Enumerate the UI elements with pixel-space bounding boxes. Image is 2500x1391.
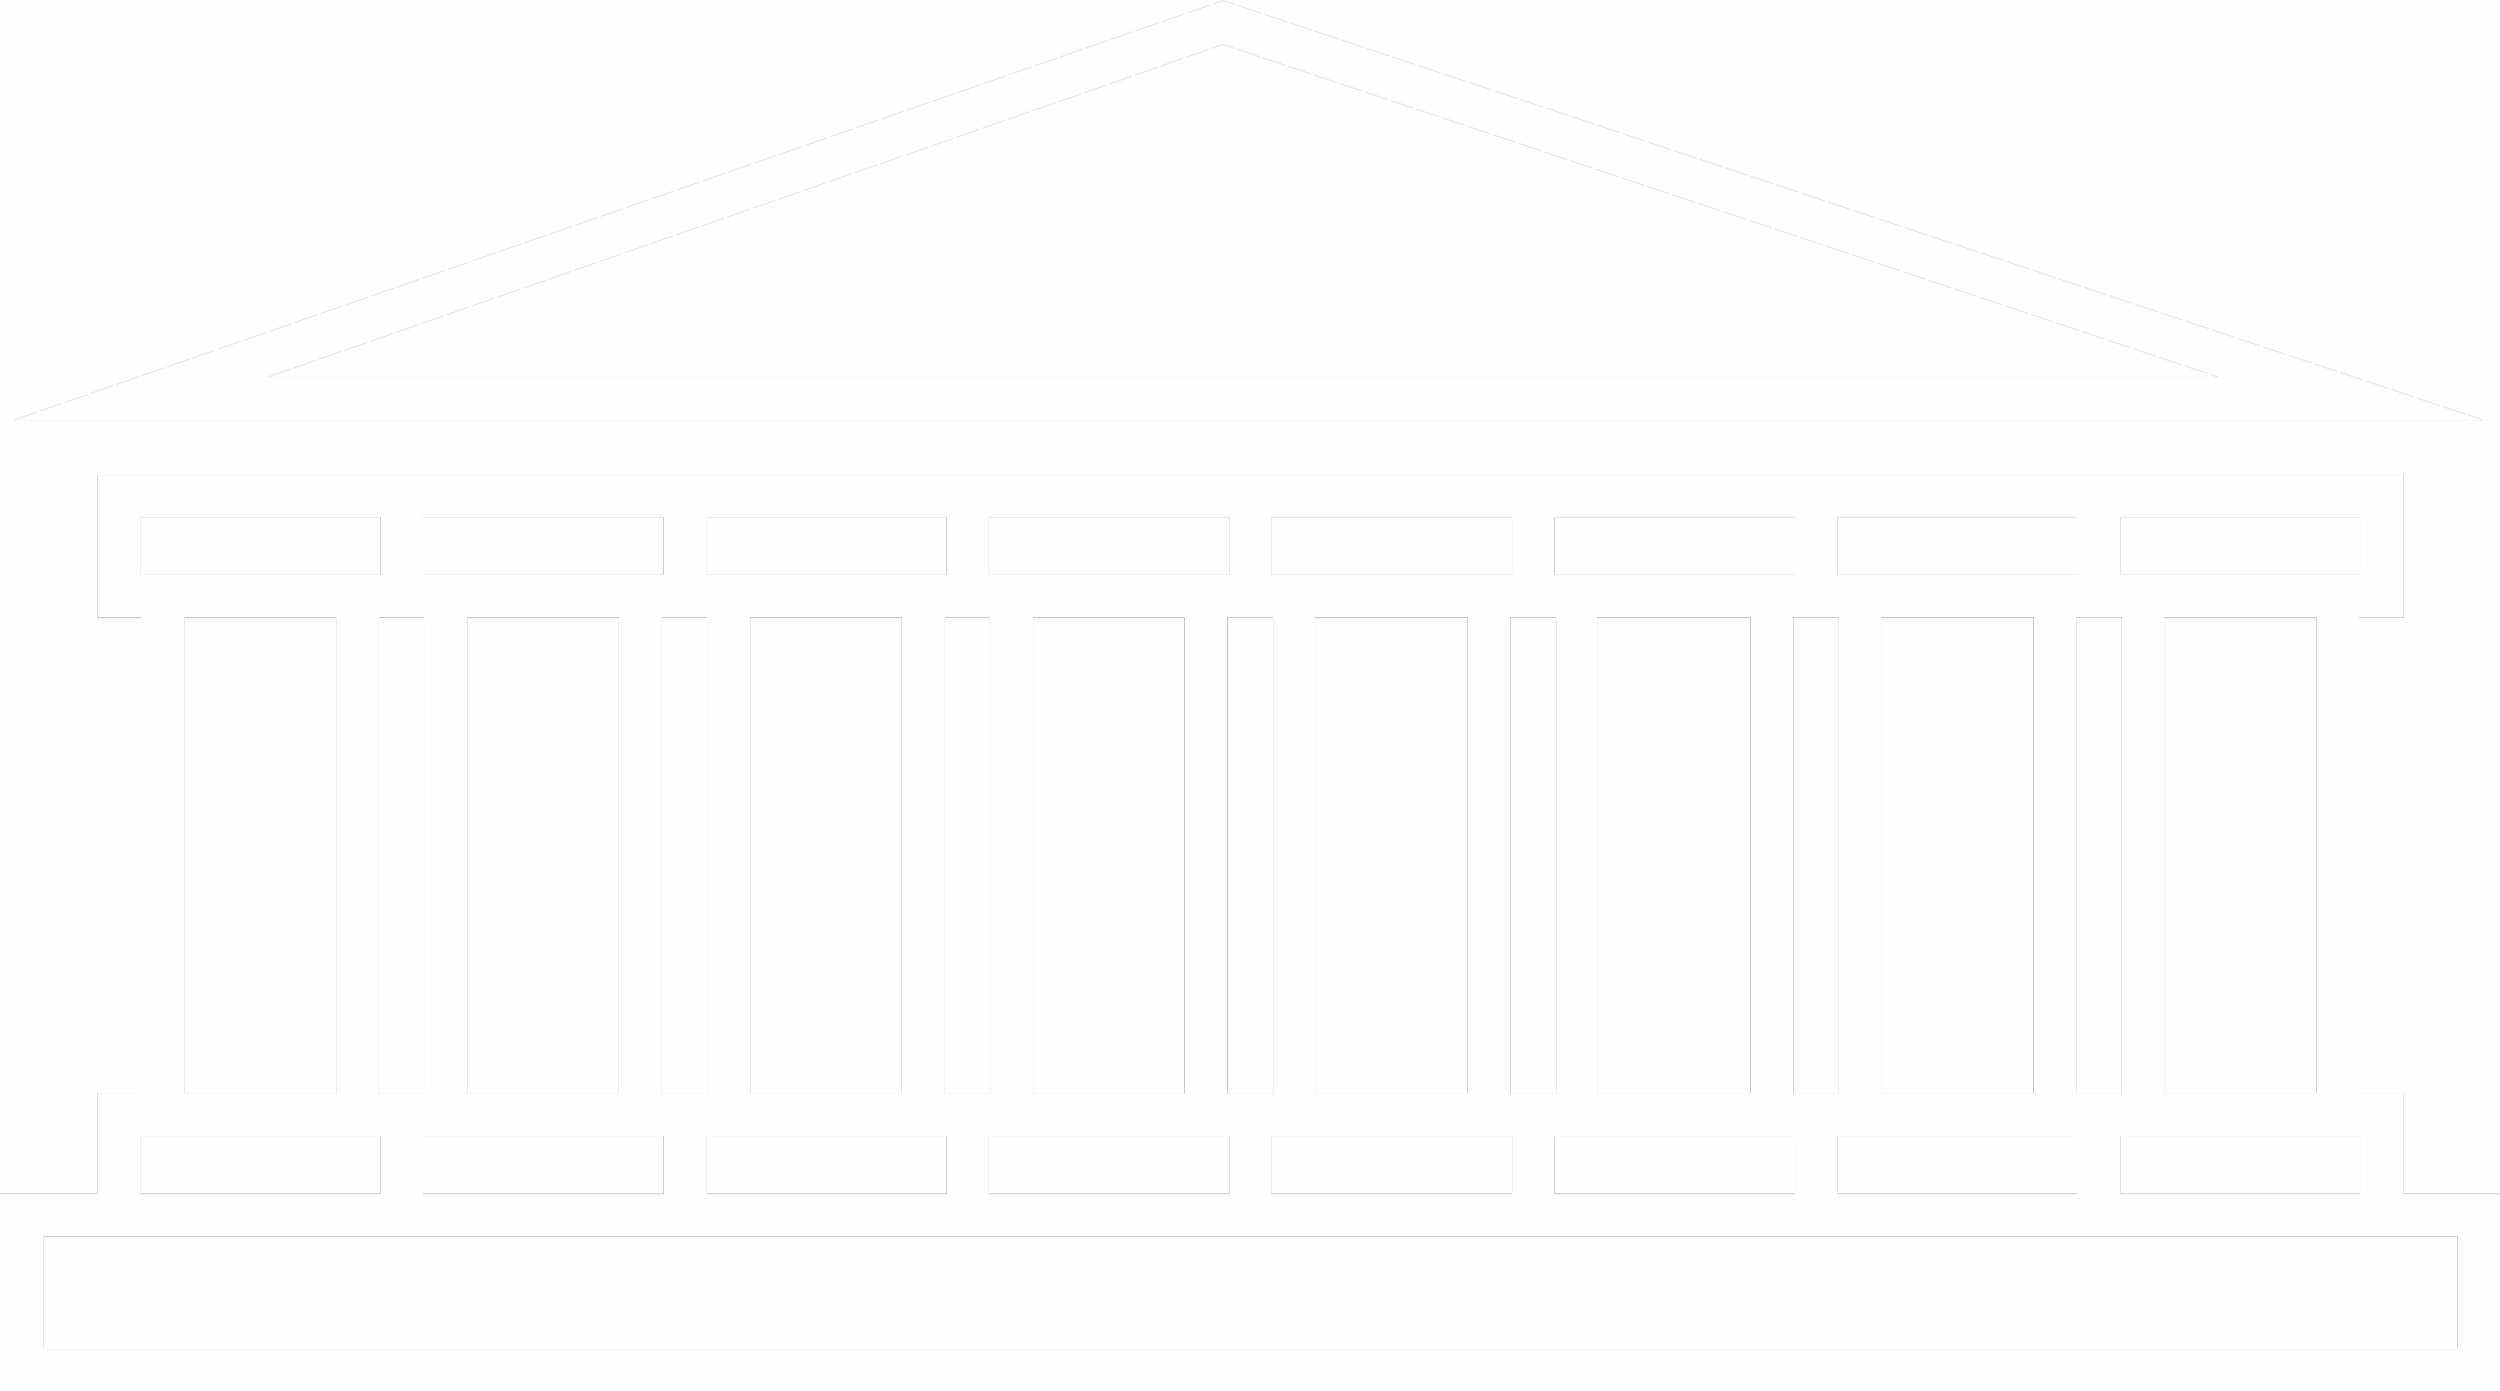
lower block 4	[988, 1136, 1230, 1194]
upper block 7	[1837, 516, 2077, 575]
upper block 6	[1554, 516, 1796, 575]
column 3	[750, 618, 902, 1094]
upper block 8	[2120, 516, 2360, 575]
inner roof triangle	[268, 44, 2218, 377]
upper row of eight blocks	[140, 516, 2360, 575]
upper block 4	[988, 516, 1230, 575]
strip 7	[2076, 618, 2122, 1094]
lower row of eight blocks	[140, 1136, 2360, 1194]
upper block 1	[140, 516, 381, 575]
upper block 2	[423, 516, 664, 575]
lower block 8	[2120, 1136, 2360, 1194]
lower block 3	[706, 1136, 947, 1194]
strip 1	[378, 618, 424, 1094]
pediment roof	[14, 0, 2483, 420]
column 4	[1033, 618, 1185, 1094]
lower block 6	[1554, 1136, 1796, 1194]
lower block 7	[1837, 1136, 2077, 1194]
column 5	[1315, 618, 1468, 1094]
strip 4	[1227, 618, 1274, 1094]
column 6	[1597, 618, 1751, 1094]
strip 3	[944, 618, 990, 1094]
lower block 1	[140, 1136, 381, 1194]
upper block 5	[1271, 516, 1512, 575]
column 1	[184, 618, 336, 1094]
column 7	[1881, 618, 2034, 1094]
strip 6	[1793, 618, 1839, 1094]
upper block 3	[706, 516, 947, 575]
outer roof triangle	[14, 0, 2483, 420]
strip 2	[662, 618, 708, 1094]
column 2	[467, 618, 619, 1094]
row of eight columns	[184, 618, 2317, 1094]
lower block 5	[1271, 1136, 1512, 1194]
column 8	[2164, 618, 2317, 1094]
base platform	[43, 1236, 2458, 1350]
lower block 2	[423, 1136, 664, 1194]
stylobate frame	[0, 1093, 2500, 1194]
strip 5	[1510, 618, 1556, 1094]
narrow strips between columns	[378, 618, 2122, 1094]
entablature frame	[97, 475, 2404, 618]
roof base lines	[14, 378, 2483, 420]
